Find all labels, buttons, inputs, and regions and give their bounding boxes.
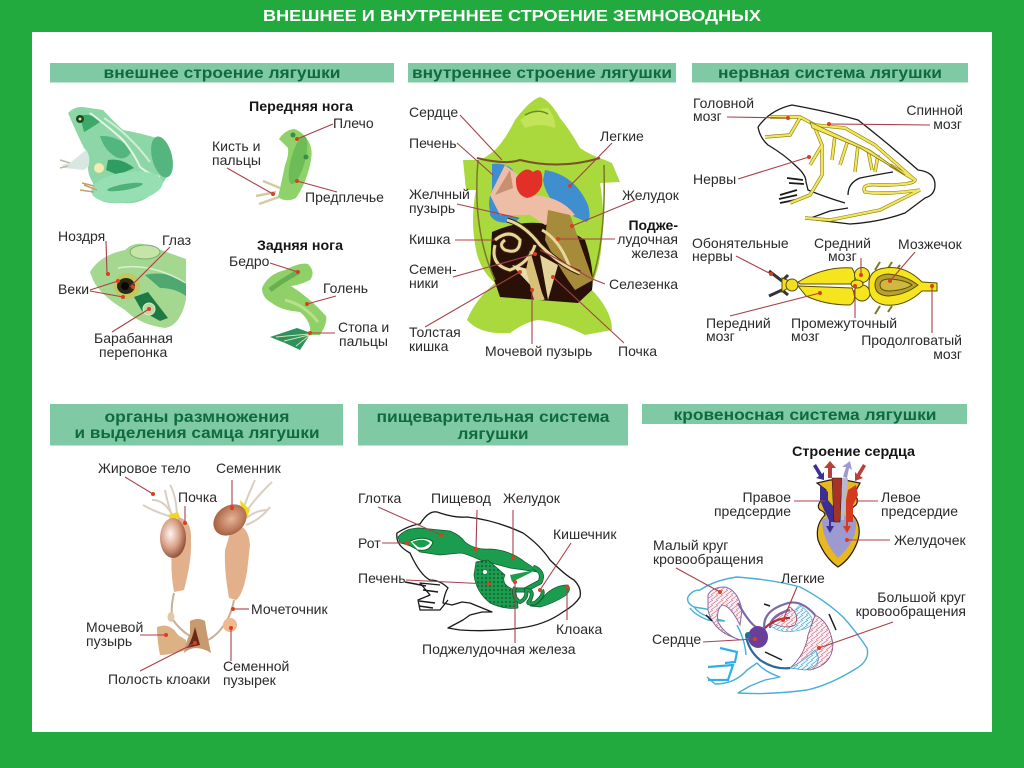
label: Легкие (781, 570, 825, 622)
label: Глаз (130, 232, 191, 289)
label: Кишка: Кишка (409, 231, 451, 247)
label: Кисть и пальцы (212, 138, 275, 196)
label: Клоака (556, 585, 602, 637)
label: Веки (58, 279, 125, 299)
label: Почка: Почка (618, 343, 657, 359)
label: Продолговатый мозг: Продолговатый (861, 332, 962, 348)
label: Головной мозг (693, 95, 790, 124)
label: Сердце (409, 104, 502, 160)
label: Глотка: Глотка (358, 490, 401, 506)
heading bar: external structure: внешнее строение лягушки (104, 65, 340, 82)
illustration: organs (143, 480, 272, 655)
heading bar: internal structure: внутреннее строение лягушки (412, 65, 672, 82)
label: Мочевой пузырь: Мочевой пузырь (485, 343, 592, 359)
label: Кишка (409, 231, 495, 247)
heading bar: digestive system: лягушки (458, 426, 528, 443)
label: Кисть и пальцы: пальцы (212, 152, 261, 168)
illustration: head close-up (90, 244, 186, 328)
label: Большой круг кровообращения: Большой круг (877, 589, 966, 605)
label: Семенник (216, 460, 282, 510)
label: Поджелудочная железа (422, 580, 576, 657)
label: Барабанная перепонка (94, 307, 173, 360)
label: Поджелудочная железа: Подже- (628, 217, 678, 233)
text: hind leg heading: Задняя нога (257, 237, 343, 253)
label: Селезенка: Селезенка (609, 276, 678, 292)
label: Мозжечок (888, 236, 963, 283)
label: Желчный пузырь: Желчный (409, 186, 470, 202)
heading bar: circulatory system (642, 404, 967, 424)
label: Передний мозг: Передний (706, 315, 771, 331)
label: Полость клоаки: Полость клоаки (108, 671, 210, 687)
label: Толстая кишка: Толстая (409, 324, 461, 340)
label: Кишечник (538, 526, 617, 592)
label: Печень: Печень (358, 570, 406, 586)
label: Малый круг кровообращения: Малый круг (653, 537, 728, 553)
label: Малый круг кровообращения (653, 537, 763, 594)
label: Поджелудочная железа (556, 217, 678, 261)
label: Продолговатый мозг (861, 284, 962, 362)
illustration: hind leg (262, 264, 326, 350)
text: heart structure heading: Строение сердца (792, 443, 915, 459)
label: Толстая кишка (409, 270, 522, 354)
label: Сердце: Сердце (652, 631, 701, 647)
label: Плечо: Плечо (333, 115, 374, 131)
label: Поджелудочная железа: лудочная (617, 231, 678, 247)
illustration: dissected frog (463, 97, 620, 335)
label: Желудок (570, 187, 680, 228)
label: Большой круг кровообращения: кровообращения (856, 603, 966, 619)
label: Печень (409, 135, 493, 175)
illustration: frog circulatory system (688, 577, 868, 694)
heading bar: digestive system (358, 404, 628, 446)
label: Желудок: Желудок (622, 187, 680, 203)
label: Печень: Печень (409, 135, 456, 151)
label: Жировое тело (98, 460, 191, 496)
illustration: frog digestive tract (397, 512, 580, 631)
label: Мозжечок: Мозжечок (898, 236, 963, 252)
label: Желудочек: Желудочек (894, 532, 967, 548)
label: Сердце (652, 631, 757, 647)
label: Средний мозг (814, 235, 871, 277)
illustration: frog nervous system (758, 105, 935, 224)
label: Легкие: Легкие (600, 128, 644, 144)
panel: digestive system (358, 404, 628, 657)
label: Семенник: Семенник (216, 460, 282, 476)
label: Бедро: Бедро (229, 253, 270, 269)
label: Легкие: Легкие (781, 570, 825, 586)
text: front leg heading: Передняя нога (249, 98, 353, 114)
label: Семенной пузырек (223, 626, 289, 688)
label: Левое предсердие (856, 489, 958, 519)
label: Поджелудочная железа: Поджелудочная железа (422, 641, 576, 657)
label: Обонятельные нервы: Обонятельные (692, 235, 789, 251)
label: Ноздря (58, 228, 110, 276)
label: Промежуточный мозг: мозг (791, 328, 820, 344)
label: Барабанная перепонка: перепонка (99, 344, 167, 360)
label: Барабанная перепонка: Барабанная (94, 330, 173, 346)
label: Глотка (358, 490, 443, 537)
label: Почка (551, 275, 657, 359)
label: Спинной мозг (827, 102, 963, 132)
label: Промежуточный мозг: Промежуточный (791, 315, 897, 331)
label: Стопа и пальцы (308, 319, 389, 349)
label: Спинной мозг: Спинной (906, 102, 963, 118)
panel: internal structure of the frog (408, 63, 680, 359)
label: Стопа и пальцы: Стопа и (338, 319, 389, 335)
panel: nervous system (692, 63, 968, 362)
label: Обонятельные нервы (692, 235, 789, 276)
heading bar: reproductive organs: органы размножения (104, 409, 290, 426)
illustration: front leg (256, 129, 312, 204)
label: Спинной мозг: мозг (933, 116, 962, 132)
label: Рот: Рот (358, 535, 381, 551)
label: Промежуточный мозг (791, 284, 897, 344)
illustration: heart (813, 461, 866, 567)
label: Ноздря: Ноздря (58, 228, 105, 244)
label: Голень (305, 280, 368, 306)
panel: circulatory system (642, 404, 967, 694)
label: Желудочек (845, 532, 967, 548)
label: Кишечник: Кишечник (553, 526, 617, 542)
label: Толстая кишка: кишка (409, 338, 449, 354)
label: Стопа и пальцы: пальцы (339, 333, 388, 349)
main title: ВНЕШНЕЕ И ВНУТРЕННЕЕ СТРОЕНИЕ ЗЕМНОВОДНЫХ (263, 8, 761, 25)
label: Правое предсердие (714, 489, 825, 519)
label: Левое предсердие: Левое (881, 489, 921, 505)
heading bar: reproductive organs: и выделения самца лягушки (74, 425, 320, 442)
label: Правое предсердие: предсердие (714, 503, 791, 519)
label: Обонятельные нервы: нервы (692, 248, 733, 264)
heading bar: reproductive organs (50, 404, 343, 446)
illustration: frog brain (769, 262, 937, 314)
label: Мочевой пузырь (485, 288, 592, 359)
label: Почка (178, 489, 217, 525)
label: Селезенка (540, 250, 678, 292)
label: Жировое тело: Жировое тело (98, 460, 191, 476)
label: Малый круг кровообращения: кровообращения (653, 551, 763, 567)
heading bar: nervous system (692, 63, 968, 82)
label: Левое предсердие: предсердие (881, 503, 958, 519)
label: Семенники: ники (409, 275, 438, 291)
heading bar: circulatory system: кровеносная система лягушки (674, 407, 936, 424)
label: Передний мозг: мозг (706, 328, 735, 344)
label: Легкие (568, 128, 644, 188)
label: Веки: Веки (58, 281, 89, 297)
label: Голень: Голень (323, 280, 368, 296)
panel: reproductive and excretory organs (50, 404, 343, 688)
label: Поджелудочная железа: железа (631, 245, 678, 261)
heading bar: external structure (50, 63, 394, 82)
label: Желудок (503, 490, 561, 560)
label: Мочеточник: Мочеточник (251, 601, 328, 617)
label: Средний мозг: Средний (814, 235, 871, 251)
panel: external structure of the frog (50, 63, 394, 360)
label: Мочевой пузырь: пузырь (86, 633, 132, 649)
label: Нервы (693, 155, 811, 187)
label: Мочевой пузырь: Мочевой (86, 619, 143, 635)
label: Головной мозг: мозг (693, 108, 722, 124)
label: Сердце: Сердце (409, 104, 458, 120)
label: Почка: Почка (178, 489, 217, 505)
label: Желудок: Желудок (503, 490, 561, 506)
label: Передний мозг (706, 291, 822, 344)
label: Головной мозг: Головной (693, 95, 754, 111)
label: Желчный пузырь: пузырь (409, 200, 455, 216)
label: Пищевод: Пищевод (431, 490, 491, 506)
heading bar: digestive system: пищеварительная система (376, 409, 610, 426)
label: Пищевод (431, 490, 491, 551)
illustration: whole frog (60, 107, 177, 207)
label: Нервы: Нервы (693, 171, 736, 187)
label: Средний мозг: мозг (828, 248, 857, 264)
label: Продолговатый мозг: мозг (933, 346, 962, 362)
label: Семенники: Семен- (409, 261, 457, 277)
label: Желчный пузырь (409, 186, 518, 218)
label: Мочевой пузырь (86, 619, 168, 649)
label: Семенной пузырек: пузырек (223, 672, 277, 688)
heading bar: nervous system: нервная система лягушки (718, 65, 942, 82)
label: Семенной пузырек: Семенной (223, 658, 289, 674)
label: Рот (358, 535, 409, 551)
label: Предплечье (295, 179, 384, 205)
label: Плечо (295, 115, 374, 141)
label: Бедро (229, 253, 300, 274)
label: Семенники (409, 252, 537, 291)
label: Глаз: Глаз (162, 232, 191, 248)
label: Клоака: Клоака (556, 621, 602, 637)
label: Полость клоаки (108, 641, 210, 687)
label: Кисть и пальцы: Кисть и (212, 138, 260, 154)
label: Предплечье: Предплечье (305, 189, 384, 205)
label: Печень (358, 570, 491, 586)
label: Правое предсердие: Правое (742, 489, 791, 505)
label: Большой круг кровообращения (817, 589, 966, 650)
